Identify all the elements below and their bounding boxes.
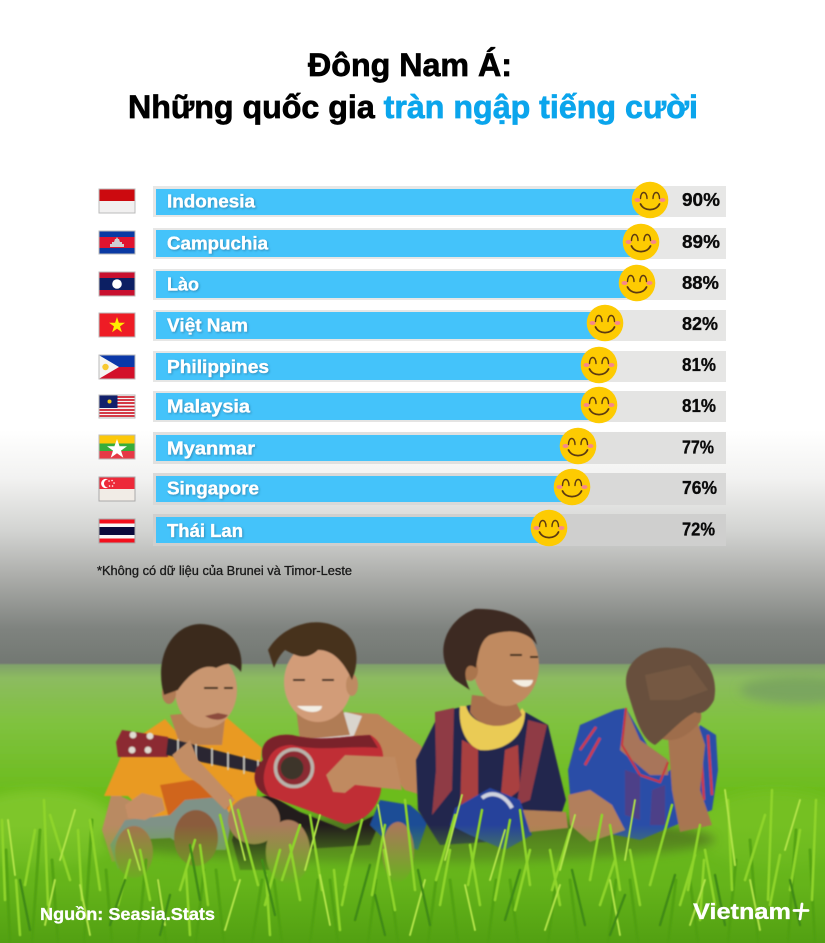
row: Campuchia: 89% xyxy=(682,232,720,252)
row: Việt Nam: 82% xyxy=(682,314,718,334)
row: Thái Lan: Thái Lan xyxy=(167,521,243,541)
row: Campuchia: Campuchia xyxy=(167,234,269,254)
row: Việt Nam xyxy=(153,305,726,341)
flag: Indonesia xyxy=(98,188,136,214)
row: Thái Lan xyxy=(153,510,726,546)
row: Malaysia: 81% xyxy=(682,396,716,416)
guitar xyxy=(116,730,383,824)
row: Việt Nam: Việt Nam xyxy=(167,316,248,336)
footnote: *Không có dữ liệu của Brunei và Timor-Leste xyxy=(97,564,352,578)
flag: Thái Lan xyxy=(98,518,136,544)
row: Philippines xyxy=(153,347,726,383)
row: Singapore: 76% xyxy=(682,478,717,498)
background fade xyxy=(0,0,825,680)
row: Lào: 88% xyxy=(682,273,719,293)
row: Singapore: Singapore xyxy=(167,478,259,498)
row: Myanmar: Myanmar xyxy=(167,438,255,458)
row: Thái Lan: 72% xyxy=(682,520,715,540)
child in orange shirt xyxy=(102,624,262,878)
grass field xyxy=(0,664,825,943)
foreground grass blades xyxy=(2,790,816,943)
lower grass xyxy=(0,885,825,943)
row: Campuchia xyxy=(153,224,726,260)
flags xyxy=(98,188,136,544)
row: Philippines: Philippines xyxy=(167,357,269,377)
flag: Malaysia xyxy=(98,394,136,418)
child laughing in striped jersey xyxy=(416,609,568,850)
flag: Philippines xyxy=(98,354,136,380)
flag: Việt Nam xyxy=(98,312,136,338)
logo: Vietnam+: Vietnam xyxy=(693,899,791,924)
row: Myanmar: 77% xyxy=(682,438,714,458)
bar chart xyxy=(153,182,726,546)
shadow under children xyxy=(105,816,715,864)
row: Indonesia xyxy=(153,182,726,218)
row: Malaysia: Malaysia xyxy=(167,396,251,416)
row: Indonesia: Indonesia xyxy=(167,192,256,212)
child hiding face in blue jersey xyxy=(568,648,718,842)
source: Nguồn: Seasia.Stats xyxy=(40,904,215,924)
flag: Myanmar xyxy=(98,434,136,460)
flag: Singapore xyxy=(98,476,136,502)
title: Những quốc gia tràn ngập tiếng cười xyxy=(128,89,698,125)
row: Lào xyxy=(153,265,726,301)
grass covering the legs xyxy=(0,825,825,885)
row: Malaysia xyxy=(153,387,726,423)
child with guitar xyxy=(228,622,447,884)
flag: Campuchia xyxy=(98,230,136,254)
hands on guitar xyxy=(172,740,402,810)
row: Indonesia: 90% xyxy=(682,190,720,210)
title: Đông Nam Á: xyxy=(308,47,512,83)
row: Lào: Lào xyxy=(167,274,199,294)
row: Singapore xyxy=(153,469,726,505)
photo: children in a rice field xyxy=(0,609,825,943)
row: Philippines: 81% xyxy=(682,355,716,375)
row: Myanmar xyxy=(153,428,726,464)
title xyxy=(128,47,698,125)
flag: Lào xyxy=(98,272,136,296)
